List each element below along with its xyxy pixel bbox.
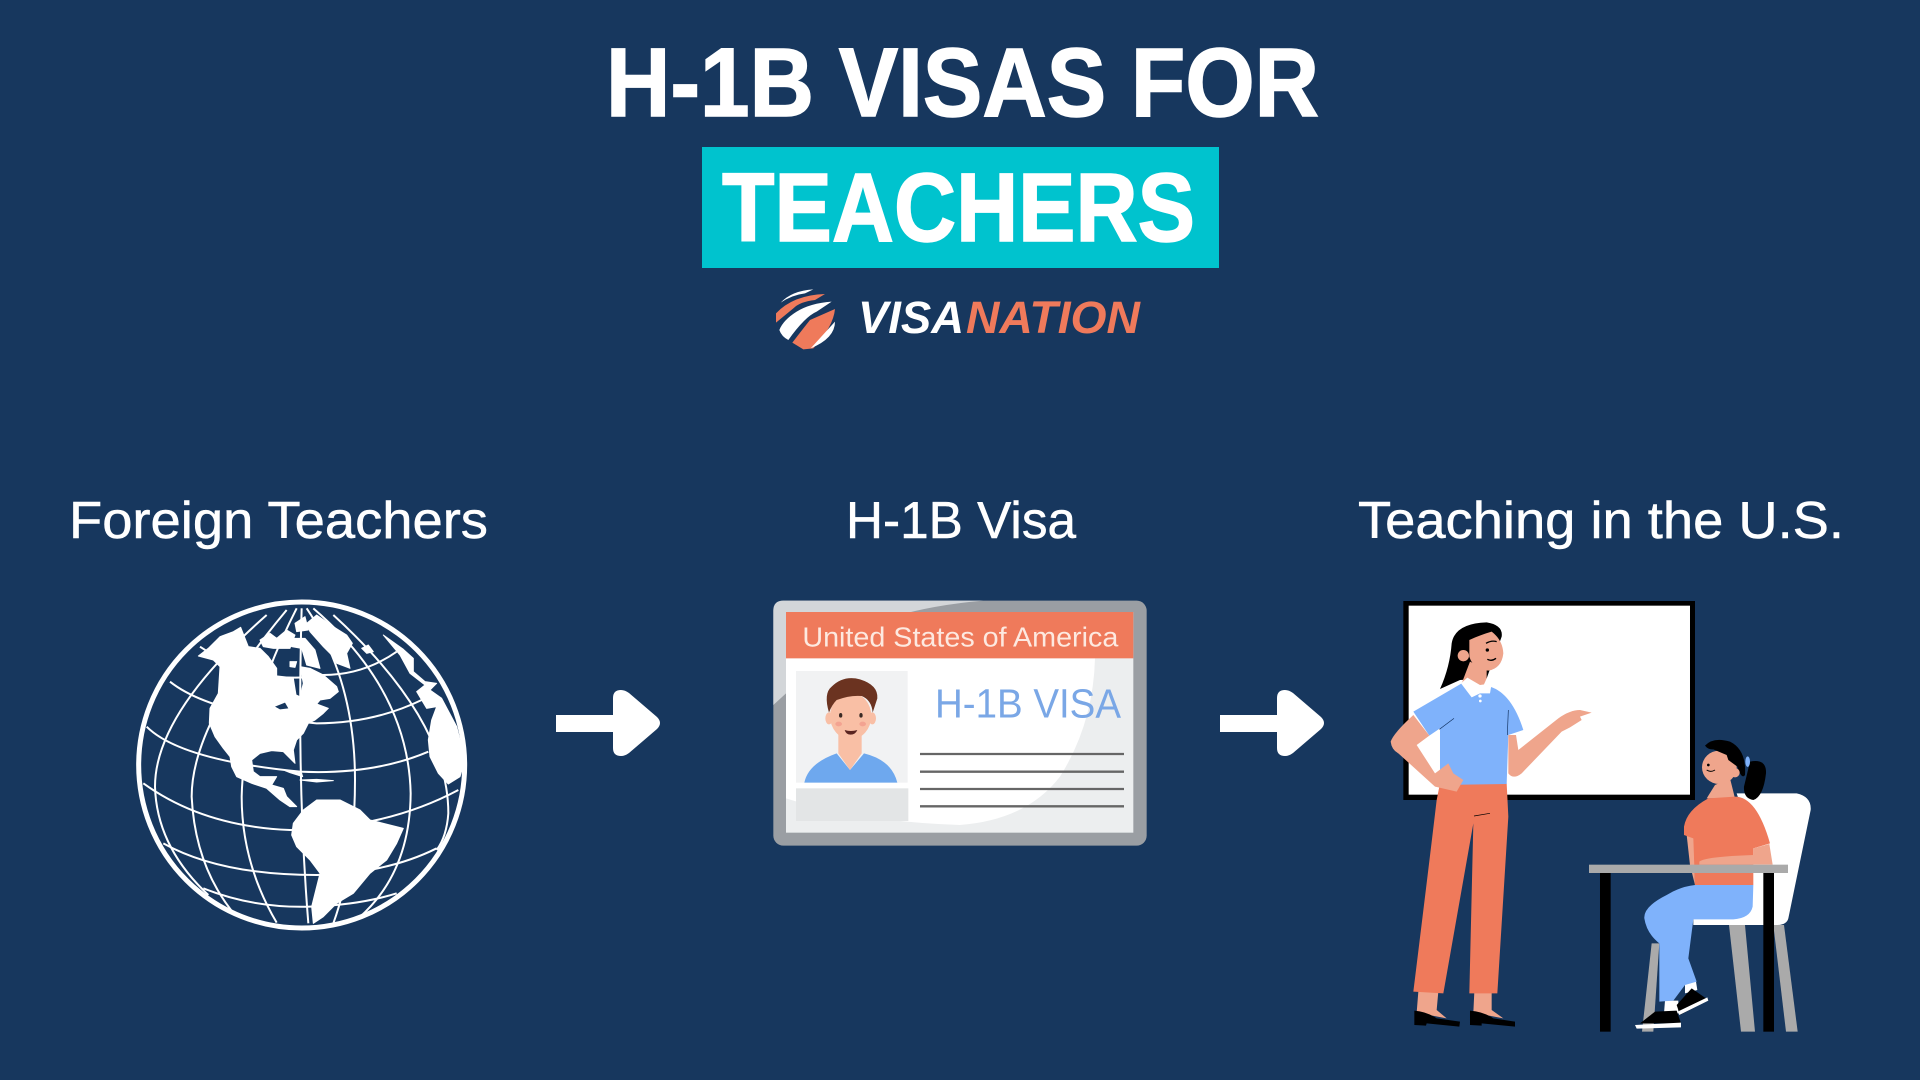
table (1589, 865, 1788, 1032)
heading: Teaching in the U.S.: Teaching in the U.S. (1358, 492, 1844, 550)
teacher shirt creases (1439, 710, 1508, 735)
student shoes (1640, 988, 1708, 1023)
frame highlight (773, 601, 983, 705)
portrait ears (825, 712, 876, 724)
classroom illustration (1391, 601, 1811, 1032)
body highlight (786, 658, 1095, 825)
portrait (804, 678, 897, 783)
title line 1: H-1B VISAS FOR (606, 28, 1319, 137)
table left leg (1600, 873, 1611, 1032)
North America (198, 627, 338, 807)
teacher shoes (1414, 1011, 1515, 1027)
teacher left arm (1391, 715, 1463, 792)
portrait cheeks (835, 722, 866, 726)
teacher smile (1487, 658, 1496, 660)
logo word VISA: VISA (858, 292, 964, 343)
student (1635, 740, 1773, 1029)
globe outer ring (139, 602, 465, 928)
logo word NATION: NATION (966, 292, 1142, 343)
arrow 1 (556, 690, 660, 756)
whiteboard (1403, 601, 1695, 800)
card header text: United States of America (802, 622, 1119, 653)
teacher neck (1462, 662, 1487, 693)
chair middle leg (1729, 925, 1755, 1032)
table top (1589, 865, 1788, 873)
board frame (1403, 601, 1695, 800)
continents (198, 615, 465, 923)
card header band (786, 612, 1133, 658)
teacher ankles (1417, 992, 1503, 1018)
student trousers (1644, 885, 1753, 1002)
signature box (796, 788, 908, 821)
teacher eye (1486, 648, 1489, 652)
teacher brow (1486, 641, 1497, 643)
arrow 2 (1220, 690, 1324, 756)
Africa and Europe (383, 635, 465, 784)
chair left leg (1642, 943, 1659, 1032)
teacher hair (1440, 622, 1502, 689)
student socks (1664, 982, 1697, 1013)
Great Lakes (275, 703, 288, 709)
title (606, 28, 1319, 268)
teacher trousers (1413, 783, 1508, 993)
student ear (1730, 768, 1740, 777)
title highlight box (702, 147, 1219, 268)
student smile (1707, 770, 1715, 771)
logo globe mark (776, 289, 835, 349)
logo: VisaNation (776, 289, 1142, 349)
Iceland (362, 645, 373, 653)
card frame (773, 601, 1147, 846)
chair right leg (1773, 925, 1798, 1032)
Arctic islands (260, 617, 320, 668)
teacher ear (1458, 650, 1469, 661)
teacher collar (1461, 678, 1492, 697)
data lines (920, 754, 1124, 806)
heading: Foreign Teachers: Foreign Teachers (69, 492, 488, 550)
student ponytail (1744, 761, 1766, 800)
visa card (773, 601, 1147, 846)
student neck (1707, 778, 1735, 798)
portrait mouth (845, 730, 857, 735)
title line 2: TEACHERS (722, 153, 1195, 262)
South America (292, 800, 403, 923)
heading: H-1B Visa: H-1B Visa (846, 492, 1076, 550)
photo background (796, 671, 908, 783)
Caribbean islands (285, 771, 333, 782)
portrait shirt (804, 753, 897, 783)
student hair tie (1745, 756, 1750, 767)
icon: globe (139, 602, 465, 928)
chair back and seat (1693, 793, 1811, 925)
portrait neck (838, 733, 862, 770)
teacher (1391, 622, 1592, 1027)
student shirt (1684, 797, 1770, 885)
student forearm (1699, 844, 1773, 865)
portrait hair (827, 678, 877, 713)
visa type text: H-1B VISA (935, 681, 1122, 727)
portrait head (830, 693, 871, 739)
teacher face (1469, 632, 1503, 671)
table right leg (1763, 873, 1774, 1032)
Greenland (307, 615, 352, 668)
student eye (1707, 764, 1710, 766)
teacher trouser crease (1474, 813, 1490, 816)
student back arm (1687, 835, 1695, 885)
teacher shirt (1413, 683, 1523, 785)
student hair (1705, 740, 1745, 776)
board surface (1409, 606, 1690, 795)
teacher right arm (1508, 710, 1592, 777)
globe grid lines (143, 608, 458, 923)
student shoe soles (1635, 997, 1708, 1029)
portrait eyes (839, 713, 863, 718)
teacher facial features (1486, 641, 1497, 660)
student face (1702, 751, 1737, 784)
card body (786, 612, 1133, 833)
chair (1642, 793, 1811, 1032)
teacher buttons (1478, 694, 1482, 702)
